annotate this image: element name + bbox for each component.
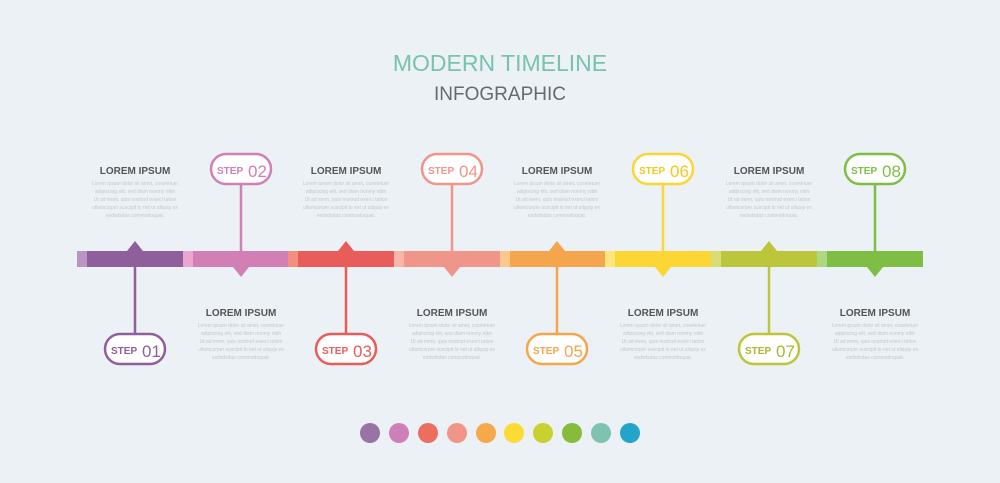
- step 02: [198, 154, 285, 361]
- step 02: 02: [248, 162, 267, 181]
- step 07: adipiscing elit, sed diam nonmy nibh: [729, 189, 809, 195]
- step 06: Lorem ipsum dolor sit amet, cosetetuer: [620, 323, 707, 329]
- step 01: esdsdsdas commodoquat.: [106, 213, 164, 219]
- step 04: STEP: [428, 166, 454, 177]
- timeline bar: [77, 251, 923, 267]
- step 07: STEP: [745, 346, 771, 357]
- title: MODERN TIMELINE: [393, 50, 607, 76]
- step 02: ullamcorper suscipit lo net ut aliquip ex: [198, 347, 284, 353]
- step 03: LOREM IPSUM: [311, 166, 381, 177]
- step 07: 07: [776, 342, 795, 361]
- step 07: Ut ad mem, quis nostrud exerci tation: [728, 197, 811, 203]
- step 02: Ut ad mem, quis nostrud exerci tation: [200, 339, 283, 345]
- color palette dots: [360, 423, 640, 443]
- step 01: STEP: [111, 346, 137, 357]
- step 08: Lorem ipsum dolor sit amet, cosetetuer: [832, 323, 919, 329]
- step 02: esdsdsdas commodoquat.: [212, 355, 270, 361]
- step 07: esdsdsdas commodoquat.: [740, 213, 798, 219]
- step 07: ullamcorper suscipit lo net ut aliquip ex: [726, 205, 812, 211]
- step 08: 08: [882, 162, 901, 181]
- step 05: 05: [564, 342, 583, 361]
- step 08: Ut ad mem, quis nostrud exerci tation: [834, 339, 917, 345]
- step 04: LOREM IPSUM: [417, 308, 487, 319]
- step 06: adipiscing elit, sed diam nonmy nibh: [623, 331, 703, 337]
- step 05: STEP: [533, 346, 559, 357]
- step 02: STEP: [217, 166, 243, 177]
- step 01: ullamcorper suscipit lo net ut aliquip ex: [92, 205, 178, 211]
- step 04: 04: [459, 162, 478, 181]
- step 04: adipiscing elit, sed diam nonmy nibh: [412, 331, 492, 337]
- step 03: ullamcorper suscipit lo net ut aliquip ex: [303, 205, 389, 211]
- step 04: esdsdsdas commodoquat.: [423, 355, 481, 361]
- step 07: [726, 166, 813, 364]
- step 05: ullamcorper suscipit lo net ut aliquip ex: [514, 205, 600, 211]
- step 04: Lorem ipsum dolor sit amet, cosetetuer: [409, 323, 496, 329]
- step 06: ullamcorper suscipit lo net ut aliquip ex: [620, 347, 706, 353]
- step 01: adipiscing elit, sed diam nonmy nibh: [95, 189, 175, 195]
- step 04: [409, 154, 496, 361]
- step 03: Lorem ipsum dolor sit amet, cosetetuer: [303, 181, 390, 187]
- step 08: adipiscing elit, sed diam nonmy nibh: [835, 331, 915, 337]
- step 01: LOREM IPSUM: [100, 166, 170, 177]
- step 08: [832, 154, 919, 361]
- step 06: [620, 154, 707, 361]
- step 08: LOREM IPSUM: [840, 308, 910, 319]
- step 01: [92, 166, 179, 364]
- step 07: Lorem ipsum dolor sit amet, cosetetuer: [726, 181, 813, 187]
- step 04: Ut ad mem, quis nostrud exerci tation: [411, 339, 494, 345]
- step 05: LOREM IPSUM: [522, 166, 592, 177]
- step 06: LOREM IPSUM: [628, 308, 698, 319]
- step 06: 06: [670, 162, 689, 181]
- step 05: Lorem ipsum dolor sit amet, cosetetuer: [514, 181, 601, 187]
- step 08: STEP: [851, 166, 877, 177]
- step 01: Lorem ipsum dolor sit amet, cosetetuer: [92, 181, 179, 187]
- step 05: [514, 166, 601, 364]
- subtitle: INFOGRAPHIC: [434, 84, 566, 105]
- step 06: esdsdsdas commodoquat.: [634, 355, 692, 361]
- step 07: LOREM IPSUM: [734, 166, 804, 177]
- step 06: STEP: [639, 166, 665, 177]
- step 02: Lorem ipsum dolor sit amet, cosetetuer: [198, 323, 285, 329]
- step 03: STEP: [322, 346, 348, 357]
- step 08: esdsdsdas commodoquat.: [846, 355, 904, 361]
- step 03: adipiscing elit, sed diam nonmy nibh: [306, 189, 386, 195]
- step 05: adipiscing elit, sed diam nonmy nibh: [517, 189, 597, 195]
- step 04: ullamcorper suscipit lo net ut aliquip ex: [409, 347, 495, 353]
- step 03: [303, 166, 390, 364]
- step 01: 01: [142, 342, 161, 361]
- step 02: LOREM IPSUM: [206, 308, 276, 319]
- step 03: Ut ad mem, quis nostrud exerci tation: [305, 197, 388, 203]
- step 06: Ut ad mem, quis nostrud exerci tation: [622, 339, 705, 345]
- step 03: 03: [353, 342, 372, 361]
- step 05: esdsdsdas commodoquat.: [528, 213, 586, 219]
- step 08: ullamcorper suscipit lo net ut aliquip ex: [832, 347, 918, 353]
- step 01: Ut ad mem, quis nostrud exerci tation: [94, 197, 177, 203]
- step 02: adipiscing elit, sed diam nonmy nibh: [201, 331, 281, 337]
- step 03: esdsdsdas commodoquat.: [317, 213, 375, 219]
- step 05: Ut ad mem, quis nostrud exerci tation: [516, 197, 599, 203]
